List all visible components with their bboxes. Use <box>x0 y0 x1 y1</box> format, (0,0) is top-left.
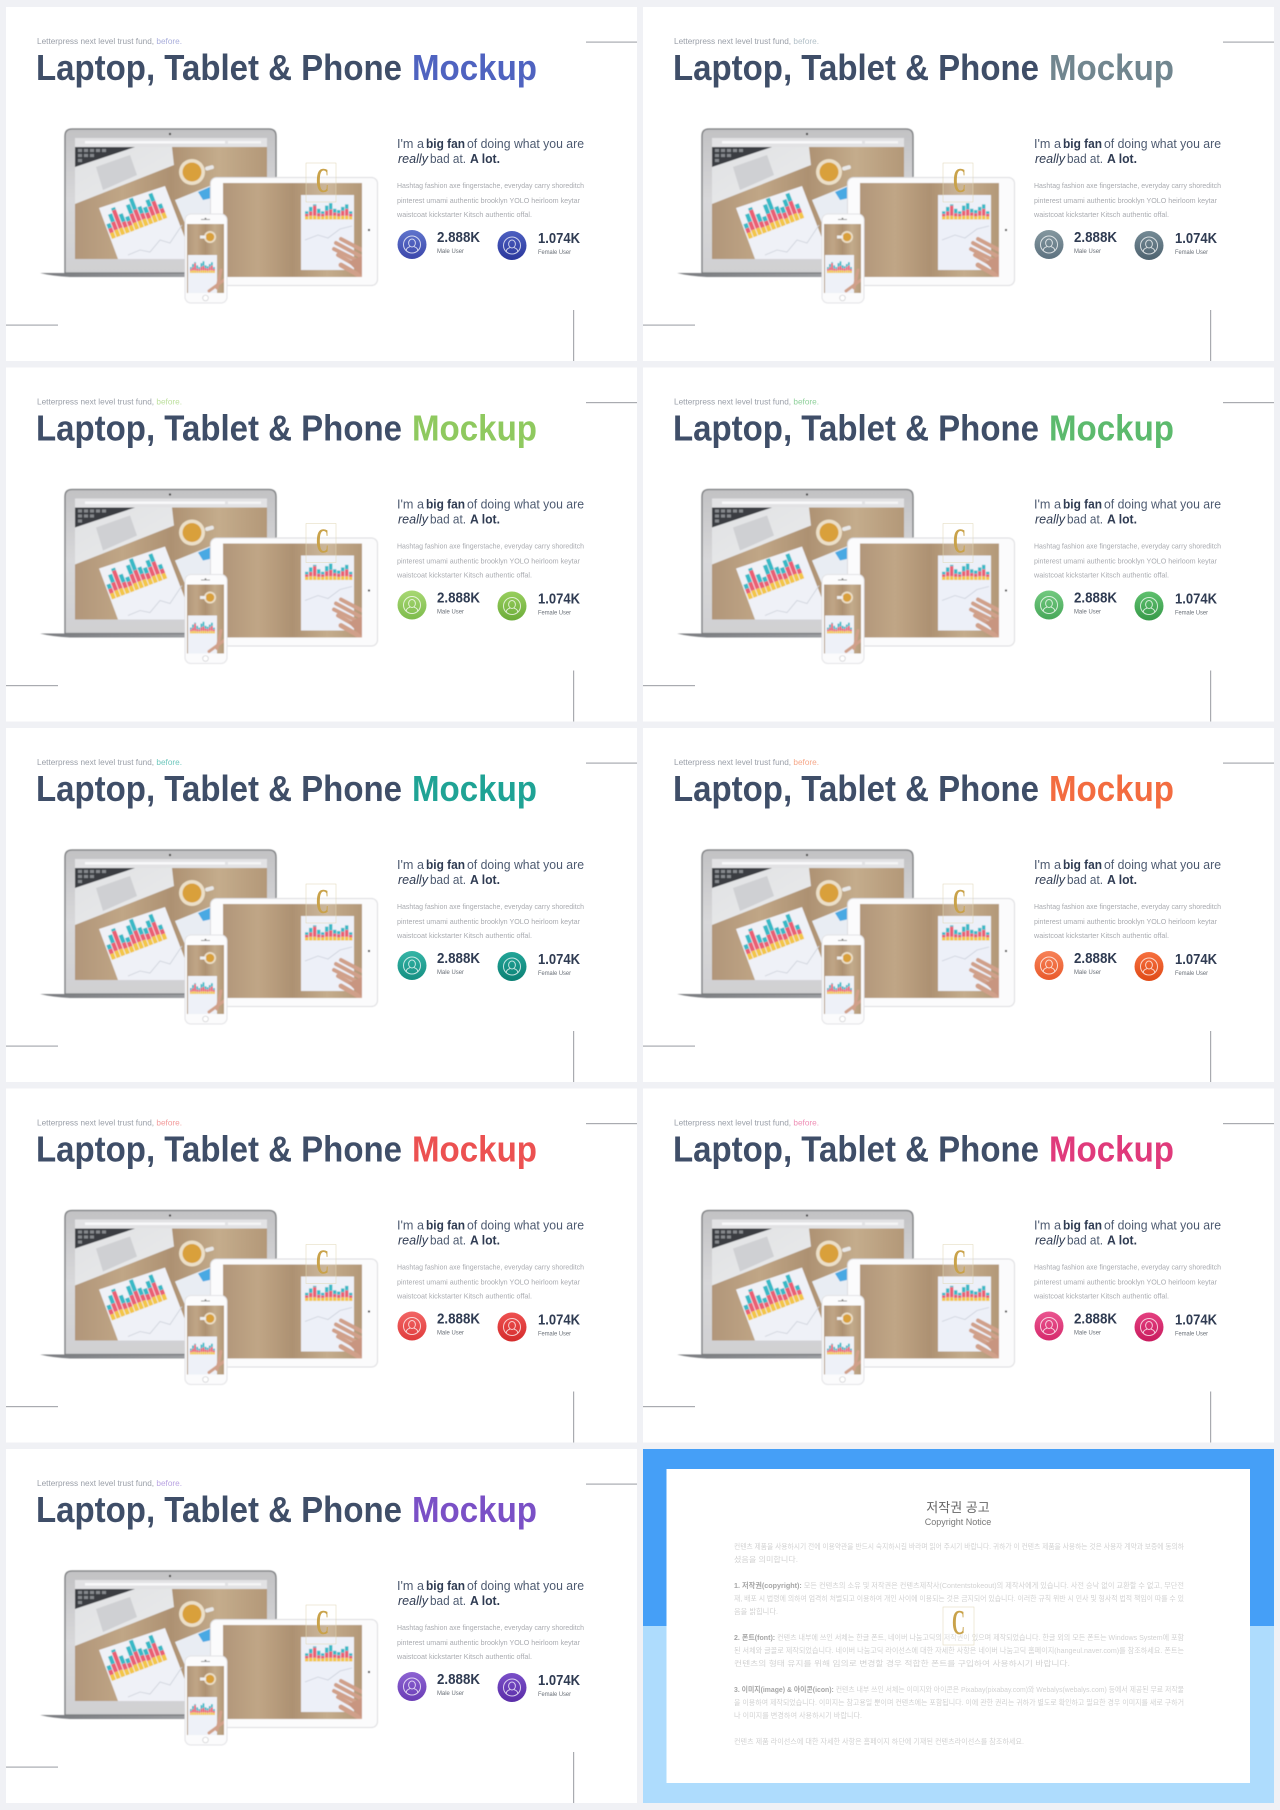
notice body: 셨음을 의미합니다. <box>734 1554 798 1564</box>
accent lines <box>643 762 1274 1082</box>
paragraph: waistcoat kickstarter Kitsch authentic offal. <box>396 210 532 219</box>
stat: male user: 2.888K <box>1074 230 1117 246</box>
headline <box>397 496 584 526</box>
stat: female user <box>498 1673 580 1702</box>
device mockups <box>40 1210 378 1384</box>
headline: A lot. <box>1107 512 1137 526</box>
device mockups <box>677 1210 1014 1384</box>
headline <box>1034 136 1221 166</box>
accent lines <box>6 42 637 361</box>
accent lines <box>6 1123 637 1442</box>
stat: male user: Male User <box>437 1330 465 1336</box>
title: Laptop, Tablet & Phone <box>673 1128 1039 1170</box>
headline: bad at. <box>430 1593 466 1608</box>
watermark: C <box>953 882 966 921</box>
paragraph <box>396 181 584 219</box>
headline: bad at. <box>430 151 466 166</box>
headline: A lot. <box>1107 872 1137 887</box>
headline <box>1034 857 1221 887</box>
device mockups <box>40 490 378 664</box>
stat: male user <box>1034 230 1117 259</box>
panel 7: red <box>6 1088 637 1442</box>
subtitle: Letterpress next level trust fund, before. <box>674 757 819 767</box>
stat: female user: 1.074K <box>538 592 580 608</box>
device mockups <box>677 490 1014 664</box>
headline: of doing what you are <box>1104 1218 1221 1232</box>
stat: male user: 2.888K <box>437 590 480 606</box>
watermark <box>306 522 336 562</box>
stat: female user: 1.074K <box>538 231 580 247</box>
paragraph: pinterest umami authentic brooklyn YOLO heirloom keytar <box>1034 556 1217 566</box>
stat: male user <box>1034 590 1117 620</box>
device mockups <box>40 850 378 1024</box>
watermark <box>306 1242 336 1284</box>
title: Laptop, Tablet & Phone <box>673 47 1039 88</box>
paragraph: waistcoat kickstarter Kitsch authentic offal. <box>1033 210 1169 219</box>
stat: female user: 1.074K <box>1175 592 1217 608</box>
paragraph: waistcoat kickstarter Kitsch authentic offal. <box>1033 1292 1169 1300</box>
stat: female user: Female User <box>538 1691 572 1698</box>
paragraph: Hashtag fashion axe fingerstache, everyday carry shoreditch <box>1034 1262 1221 1272</box>
headline <box>397 136 584 166</box>
headline: of doing what you are <box>1104 496 1221 512</box>
headline: I'm a <box>1034 496 1062 512</box>
stat: female user: 1.074K <box>1175 952 1217 968</box>
title: Mockup <box>1049 408 1174 448</box>
stat: female user: 1.074K <box>1175 231 1217 247</box>
title: Mockup <box>412 1128 537 1170</box>
title: Laptop, Tablet & Phone <box>36 47 402 88</box>
title: Mockup <box>1049 47 1174 88</box>
paragraph: pinterest umami authentic brooklyn YOLO heirloom keytar <box>397 917 580 926</box>
stat: male user: Male User <box>1074 248 1102 255</box>
paragraph: pinterest umami authentic brooklyn YOLO heirloom keytar <box>397 1638 580 1647</box>
headline: of doing what you are <box>467 857 584 872</box>
stat: male user: Male User <box>437 248 465 255</box>
watermark <box>943 522 973 562</box>
headline: I'm a <box>397 857 425 872</box>
device mockups <box>40 129 378 303</box>
notice body: 된 서체와 글꼴로 제작되었습니다. 네이버 나눔고딕 라이선스에 대한 자세한 사항은 네이버 나눔고딕 홈페이지(hangeul.naver.com)를 참조하세요. 폰트는 <box>734 1645 1184 1655</box>
watermark: C <box>316 882 329 921</box>
watermark <box>306 882 336 923</box>
headline: I'm a <box>397 496 425 512</box>
stat: male user <box>398 951 480 980</box>
headline: of doing what you are <box>467 1218 584 1232</box>
headline: of doing what you are <box>467 496 584 512</box>
headline: big fan <box>426 136 465 151</box>
stat: female user: 1.074K <box>1175 1312 1217 1328</box>
stat: male user <box>1034 1312 1117 1340</box>
headline: A lot. <box>470 151 500 166</box>
headline: of doing what you are <box>1104 136 1221 151</box>
paragraph <box>396 902 584 940</box>
stat: male user: 2.888K <box>437 1672 480 1688</box>
paragraph: Hashtag fashion axe fingerstache, everyday carry shoreditch <box>397 181 584 190</box>
title: Mockup <box>412 408 537 448</box>
stat: male user: 2.888K <box>437 951 480 967</box>
watermark <box>306 161 336 202</box>
paragraph: Hashtag fashion axe fingerstache, everyday carry shoreditch <box>397 1623 584 1632</box>
paragraph: waistcoat kickstarter Kitsch authentic offal. <box>1033 931 1169 940</box>
subtitle: Letterpress next level trust fund, before. <box>37 36 182 46</box>
watermark: C <box>953 1242 966 1282</box>
stat: female user <box>1134 231 1217 260</box>
paragraph: pinterest umami authentic brooklyn YOLO heirloom keytar <box>1034 917 1217 926</box>
title: Mockup <box>1049 768 1174 809</box>
stat: male user: 2.888K <box>1074 590 1117 606</box>
watermark: C <box>316 522 329 560</box>
title: Mockup <box>1049 1128 1174 1170</box>
paragraph <box>396 1262 584 1300</box>
watermark: C <box>316 1603 329 1642</box>
title: Mockup <box>412 768 537 809</box>
accent lines <box>6 1484 637 1803</box>
stat: female user: Female User <box>1175 610 1209 616</box>
accent lines <box>6 762 637 1082</box>
subtitle: Letterpress next level trust fund, before. <box>674 396 819 406</box>
title: Laptop, Tablet & Phone <box>673 408 1039 448</box>
watermark <box>943 1242 973 1284</box>
stat: male user: Male User <box>437 969 465 976</box>
headline: big fan <box>1063 136 1102 151</box>
headline: really <box>1035 512 1066 526</box>
panel 10: copyright notice <box>643 1449 1274 1803</box>
watermark: C <box>953 522 966 560</box>
stat: male user <box>398 230 480 259</box>
stat: female user <box>1134 592 1217 620</box>
title: Laptop, Tablet & Phone <box>36 1128 402 1170</box>
device mockups <box>677 850 1014 1024</box>
stat: male user: Male User <box>437 608 465 616</box>
stat: female user: Female User <box>538 1330 572 1338</box>
headline: really <box>1035 872 1066 887</box>
headline: I'm a <box>397 1578 425 1593</box>
panel 9: purple <box>6 1449 637 1803</box>
watermark: C <box>953 161 966 200</box>
stat: female user: Female User <box>538 249 572 256</box>
title: Mockup <box>412 1489 537 1530</box>
watermark <box>943 161 973 202</box>
notice body: 2. 폰트(font): 컨텐츠 내부에 쓰인 서체는 한글 폰트, 네이버 나눔고딕의 저작권이 있으며 제작되었습니다. 한글 외의 모든 폰트는 Windows System에 포함 <box>734 1632 1184 1642</box>
paragraph: waistcoat kickstarter Kitsch authentic offal. <box>396 931 532 940</box>
stat: male user <box>398 1312 480 1340</box>
paragraph: Hashtag fashion axe fingerstache, everyday carry shoreditch <box>1034 181 1221 190</box>
panel 1: indigo <box>6 7 637 361</box>
watermark: C <box>952 1603 965 1642</box>
watermark: C <box>316 161 329 200</box>
headline: A lot. <box>1107 151 1137 166</box>
watermark <box>306 1603 336 1644</box>
stat: male user: Male User <box>1074 608 1102 616</box>
paragraph: pinterest umami authentic brooklyn YOLO heirloom keytar <box>1034 1278 1217 1286</box>
paragraph: Hashtag fashion axe fingerstache, everyday carry shoreditch <box>1034 902 1221 911</box>
paragraph: pinterest umami authentic brooklyn YOLO heirloom keytar <box>397 556 580 566</box>
notice body: 재, 배포 시 법령에 의하여 엄격히 처벌되고 이용하여 개인 사이에 이용되는 것은 금지되어 있습니다. 이러한 규칙 위반 시 민사 및 형사적 법적 책임이 따를 수 있 <box>734 1593 1184 1603</box>
stat: male user <box>398 1672 480 1701</box>
headline: bad at. <box>430 1232 466 1248</box>
panel 2: slate <box>643 7 1274 361</box>
paragraph: Hashtag fashion axe fingerstache, everyday carry shoreditch <box>397 1262 584 1272</box>
paragraph <box>396 542 584 580</box>
paragraph: waistcoat kickstarter Kitsch authentic offal. <box>396 570 532 580</box>
stat: male user: 2.888K <box>1074 951 1117 967</box>
paragraph <box>396 1623 584 1661</box>
title: Laptop, Tablet & Phone <box>673 768 1039 809</box>
paragraph: Hashtag fashion axe fingerstache, everyday carry shoreditch <box>397 542 584 550</box>
notice heading: Copyright Notice <box>925 1517 991 1527</box>
headline: big fan <box>1063 496 1102 512</box>
panel 3: light green <box>6 368 637 722</box>
paragraph <box>1033 181 1221 219</box>
paragraph: pinterest umami authentic brooklyn YOLO heirloom keytar <box>1034 196 1217 205</box>
notice body: 나 이미지를 변경하여 사용하시기 바랍니다. <box>734 1710 862 1720</box>
notice body: 컨텐츠 제품을 사용하시기 전에 이용약관을 반드시 숙지하시길 바라며 읽어 주시기 바랍니다. 귀하가 이 컨텐츠 제품을 사용하는 것은 사용자 계약과 보증에 동의하 <box>734 1541 1184 1551</box>
headline: really <box>398 872 429 887</box>
stat: female user <box>498 231 580 260</box>
stat: male user: Male User <box>1074 969 1102 976</box>
stat: female user: Female User <box>538 610 572 616</box>
subtitle: Letterpress next level trust fund, before. <box>37 1118 182 1128</box>
accent lines <box>6 402 637 722</box>
headline: I'm a <box>397 1218 425 1232</box>
watermark <box>943 1603 974 1645</box>
subtitle: Letterpress next level trust fund, before. <box>674 1118 819 1128</box>
title: Laptop, Tablet & Phone <box>36 768 402 809</box>
headline: big fan <box>1063 857 1102 872</box>
title: Laptop, Tablet & Phone <box>36 1489 402 1530</box>
headline: really <box>1035 151 1066 166</box>
stat: male user: 2.888K <box>437 1312 480 1328</box>
title: Laptop, Tablet & Phone <box>36 408 402 448</box>
paragraph: pinterest umami authentic brooklyn YOLO heirloom keytar <box>397 196 580 205</box>
notice heading: 저작권 공고 <box>926 1500 990 1515</box>
stat: female user <box>498 1312 580 1342</box>
title: Mockup <box>412 47 537 88</box>
panel 6: orange <box>643 728 1274 1082</box>
subtitle: Letterpress next level trust fund, before. <box>674 36 819 46</box>
notice heading <box>925 1500 991 1527</box>
device mockups <box>677 129 1014 303</box>
accent lines <box>643 402 1274 722</box>
paragraph: waistcoat kickstarter Kitsch authentic offal. <box>396 1652 532 1661</box>
notice body: 컨텐츠 제품 라이선스에 대한 자세한 사항은 홈페이지 하단에 기재된 컨텐츠라이선스를 참조하세요. <box>734 1736 1024 1746</box>
headline <box>1034 1218 1221 1248</box>
headline: bad at. <box>1067 512 1103 526</box>
paragraph: waistcoat kickstarter Kitsch authentic offal. <box>396 1292 532 1300</box>
headline: of doing what you are <box>467 1578 584 1593</box>
paragraph: Hashtag fashion axe fingerstache, everyday carry shoreditch <box>1034 542 1221 550</box>
stat: male user: 2.888K <box>437 230 480 246</box>
headline: really <box>398 512 429 526</box>
headline: big fan <box>426 1578 465 1593</box>
watermark <box>943 882 973 923</box>
panel 8: pink <box>643 1088 1274 1442</box>
headline: A lot. <box>470 512 500 526</box>
headline: really <box>398 151 429 166</box>
headline: A lot. <box>470 872 500 887</box>
headline: bad at. <box>1067 1232 1103 1248</box>
headline: big fan <box>426 857 465 872</box>
headline: bad at. <box>1067 872 1103 887</box>
stat: female user: Female User <box>1175 1330 1209 1338</box>
panel 4: green <box>643 368 1274 722</box>
notice body <box>734 1541 1184 1746</box>
stat: male user: Male User <box>1074 1330 1102 1336</box>
stat: female user: Female User <box>1175 970 1209 977</box>
headline: of doing what you are <box>467 136 584 151</box>
stat: female user: 1.074K <box>538 952 580 968</box>
paragraph: pinterest umami authentic brooklyn YOLO heirloom keytar <box>397 1278 580 1286</box>
accent lines <box>643 1123 1274 1442</box>
headline: bad at. <box>430 872 466 887</box>
stat: female user: Female User <box>1175 249 1209 256</box>
stat: female user <box>498 592 580 620</box>
headline: of doing what you are <box>1104 857 1221 872</box>
headline: A lot. <box>470 1593 500 1608</box>
stat: male user <box>398 590 480 620</box>
stat: female user <box>1134 952 1217 981</box>
notice body: 3. 이미지(image) & 아이콘(icon): 컨텐츠 내부 쓰인 서체는 이미지와 아이콘은 Pixabay(pixabay.com)와 Webalys(webalys.com) 등에서 제공된 무료 저작물 <box>734 1684 1184 1694</box>
paragraph <box>1033 902 1221 940</box>
stat: female user: 1.074K <box>538 1312 580 1328</box>
headline: I'm a <box>1034 857 1062 872</box>
stat: female user: Female User <box>538 970 572 977</box>
headline: bad at. <box>1067 151 1103 166</box>
headline <box>397 857 584 887</box>
headline: big fan <box>426 496 465 512</box>
headline: A lot. <box>1107 1232 1137 1248</box>
headline: really <box>1035 1232 1066 1248</box>
headline: I'm a <box>397 136 425 151</box>
stat: female user: 1.074K <box>538 1673 580 1689</box>
paragraph: waistcoat kickstarter Kitsch authentic offal. <box>1033 570 1169 580</box>
subtitle: Letterpress next level trust fund, before. <box>37 396 182 406</box>
subtitle: Letterpress next level trust fund, before. <box>37 757 182 767</box>
headline: big fan <box>1063 1218 1102 1232</box>
panel 5: teal <box>6 728 637 1082</box>
watermark: C <box>316 1242 329 1282</box>
paragraph <box>1033 542 1221 580</box>
stat: female user <box>1134 1312 1217 1342</box>
accent lines <box>643 42 1274 361</box>
paragraph: Hashtag fashion axe fingerstache, everyday carry shoreditch <box>397 902 584 911</box>
headline: I'm a <box>1034 1218 1062 1232</box>
headline <box>397 1578 584 1608</box>
headline: A lot. <box>470 1232 500 1248</box>
stat: male user <box>1034 951 1117 980</box>
headline <box>1034 496 1221 526</box>
stat: male user: Male User <box>437 1690 465 1697</box>
notice body: 음을 밝힙니다. <box>734 1606 778 1616</box>
device mockups <box>40 1571 378 1745</box>
paragraph <box>1033 1262 1221 1300</box>
notice body: 을 이용하여 제작되었습니다. 이미지는 참고용일 뿐이며 컨텐츠에는 포함됩니다. 이에 관한 권리는 귀하가 별도로 확인하고 필요한 경우 이미지를 새로 구하거 <box>734 1697 1184 1707</box>
headline: bad at. <box>430 512 466 526</box>
subtitle: Letterpress next level trust fund, before. <box>37 1478 182 1488</box>
notice body: 컨텐츠의 형태 유지를 위해 임의로 변경할 경우 적합한 폰트를 구입하여 사용하시기 바랍니다. <box>734 1658 1070 1668</box>
stat: female user <box>498 952 580 981</box>
headline: really <box>398 1232 429 1248</box>
headline: really <box>398 1593 429 1608</box>
notice body: 1. 저작권(copyright): 모든 컨텐츠의 소유 및 저작권은 컨텐츠제작사(Contentstokeout)의 제작사에게 있습니다. 사전 승낙 없이 교환할 수 없고, 무단전 <box>734 1580 1184 1590</box>
stat: male user: 2.888K <box>1074 1312 1117 1328</box>
headline <box>397 1218 584 1248</box>
headline: I'm a <box>1034 136 1062 151</box>
headline: big fan <box>426 1218 465 1232</box>
